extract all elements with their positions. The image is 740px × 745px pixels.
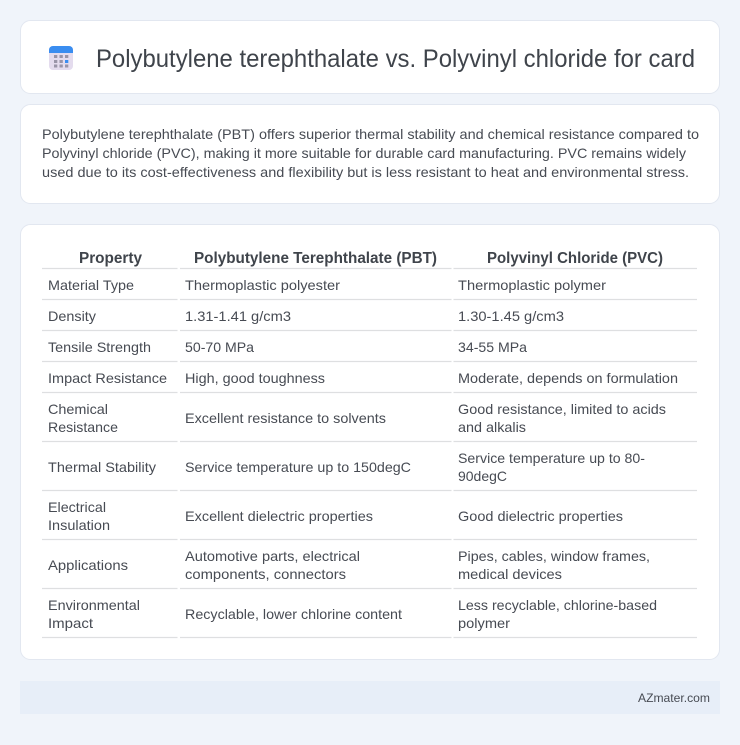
- row: environmental impact: Recyclable, lower chlorine content: [185, 606, 402, 622]
- row: environmental impact: Environmental: [48, 597, 140, 613]
- row: environmental impact: Less recyclable, chlorine-based: [458, 597, 657, 613]
- row: tensile strength: [48, 339, 527, 355]
- row: impact resistance: Impact Resistance: [48, 370, 167, 386]
- row: environmental impact: polymer: [458, 615, 510, 631]
- summary text: Polyvinyl chloride (PVC), making it more suitable for durable card manufacturing. PVC remains widely: [42, 145, 686, 161]
- row: applications: medical devices: [458, 566, 562, 582]
- row: chemical resistance: Resistance: [48, 419, 118, 435]
- row: thermal stability: Thermal Stability: [48, 459, 156, 475]
- row: chemical resistance: Good resistance, limited to acids: [458, 401, 666, 417]
- row: electrical insulation: Excellent dielectric properties: [185, 508, 373, 524]
- table header: Property: [79, 250, 142, 267]
- row: thermal stability: [48, 450, 645, 484]
- row: electrical insulation: Insulation: [48, 517, 110, 533]
- row: chemical resistance: Excellent resistance to solvents: [185, 410, 386, 426]
- row: density: 1.30-1.45 g/cm3: [458, 308, 564, 324]
- row: density: [48, 308, 564, 324]
- row: tensile strength: 50-70 MPa: [185, 339, 254, 355]
- row: environmental impact: Impact: [48, 615, 93, 631]
- footer credit: AZmater.com: [638, 691, 710, 705]
- row: electrical insulation: Electrical: [48, 499, 106, 515]
- icon: calendar: [49, 46, 73, 70]
- row: material type: Thermoplastic polymer: [458, 277, 606, 293]
- row: density: Density: [48, 308, 96, 324]
- row: chemical resistance: [48, 401, 666, 435]
- title: Polybutylene terephthalate vs. Polyvinyl chloride for card: [96, 45, 695, 73]
- row: environmental impact: [48, 597, 657, 631]
- row: density: 1.31-1.41 g/cm3: [185, 308, 291, 324]
- footer band: [20, 681, 720, 714]
- row: applications: [48, 548, 650, 582]
- row: chemical resistance: Chemical: [48, 401, 108, 417]
- row: chemical resistance: and alkalis: [458, 419, 526, 435]
- table header: [79, 250, 663, 267]
- panel: title header: [20, 20, 720, 94]
- summary text: Polybutylene terephthalate (PBT) offers superior thermal stability and chemical resistance compared to: [42, 126, 699, 142]
- row: tensile strength: 34-55 MPa: [458, 339, 527, 355]
- row: thermal stability: 90degC: [458, 468, 507, 484]
- row: electrical insulation: [48, 499, 623, 533]
- row: impact resistance: [48, 370, 678, 386]
- row: material type: Thermoplastic polyester: [185, 277, 340, 293]
- panel: comparison table: [20, 224, 720, 660]
- row: tensile strength: Tensile Strength: [48, 339, 151, 355]
- row: applications: Automotive parts, electrical: [185, 548, 360, 564]
- row: electrical insulation: Good dielectric properties: [458, 508, 623, 524]
- summary text: [42, 126, 699, 180]
- summary text: used due to its cost-effectiveness and flexibility but is less resistant to heat and environmental stress.: [42, 164, 689, 180]
- table header: Polyvinyl Chloride (PVC): [487, 250, 663, 267]
- panel: summary: [20, 104, 720, 204]
- row: impact resistance: High, good toughness: [185, 370, 325, 386]
- row: thermal stability: Service temperature up to 80-: [458, 450, 645, 466]
- row: applications: Applications: [48, 557, 128, 573]
- row: applications: Pipes, cables, window frames,: [458, 548, 650, 564]
- row: impact resistance: Moderate, depends on formulation: [458, 370, 678, 386]
- row: applications: components, connectors: [185, 566, 346, 582]
- table header: Polybutylene Terephthalate (PBT): [194, 250, 437, 267]
- row: material type: [48, 277, 606, 293]
- row: thermal stability: Service temperature up to 150degC: [185, 459, 411, 475]
- row: material type: Material Type: [48, 277, 134, 293]
